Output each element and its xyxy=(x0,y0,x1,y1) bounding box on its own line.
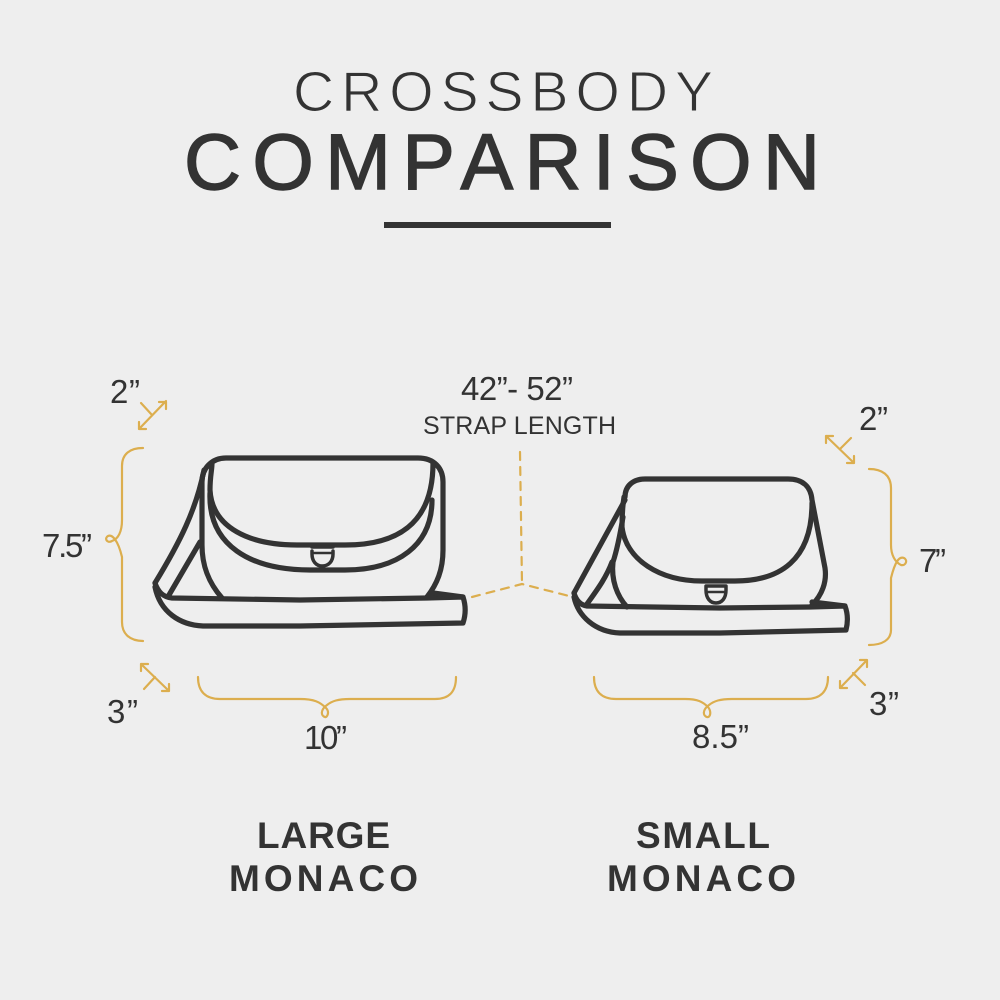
small bag dimension labels: 2” xyxy=(859,400,888,437)
large bag width brace xyxy=(198,677,456,717)
strap length label xyxy=(423,370,616,440)
small monaco name xyxy=(607,815,796,899)
strap dashed connector xyxy=(472,452,573,597)
large bag depth arrows xyxy=(139,401,169,691)
small bag illustration xyxy=(574,479,847,633)
strap length label: STRAP LENGTH xyxy=(423,412,616,440)
large bag illustration xyxy=(155,458,465,626)
strap length label: 42”- 52” xyxy=(461,370,573,407)
large bag dimension labels: 3” xyxy=(107,693,138,730)
title: CROSSBODY xyxy=(293,60,713,124)
large bag height brace xyxy=(106,448,143,641)
large bag dimension labels xyxy=(42,373,347,756)
title: COMPARISON xyxy=(184,117,820,206)
small bag dimension labels: 3” xyxy=(869,685,899,722)
large bag dimension labels: 7.5” xyxy=(42,527,92,564)
large monaco name: LARGE xyxy=(257,815,390,856)
small monaco name: MONACO xyxy=(607,858,796,899)
small bag dimension labels: 7” xyxy=(919,542,946,579)
title underline xyxy=(384,222,611,228)
large bag dimension labels: 2” xyxy=(110,373,140,410)
large bag dimension labels: 10” xyxy=(304,719,347,756)
small monaco name: SMALL xyxy=(636,815,770,856)
large monaco name: MONACO xyxy=(229,858,418,899)
title xyxy=(184,60,820,206)
small bag dimension labels: 8.5” xyxy=(692,718,749,755)
small bag dimension labels xyxy=(692,400,946,755)
large monaco name xyxy=(229,815,418,899)
small bag height brace xyxy=(869,469,906,645)
small bag width brace xyxy=(594,677,828,717)
small bag depth arrows xyxy=(826,436,867,688)
